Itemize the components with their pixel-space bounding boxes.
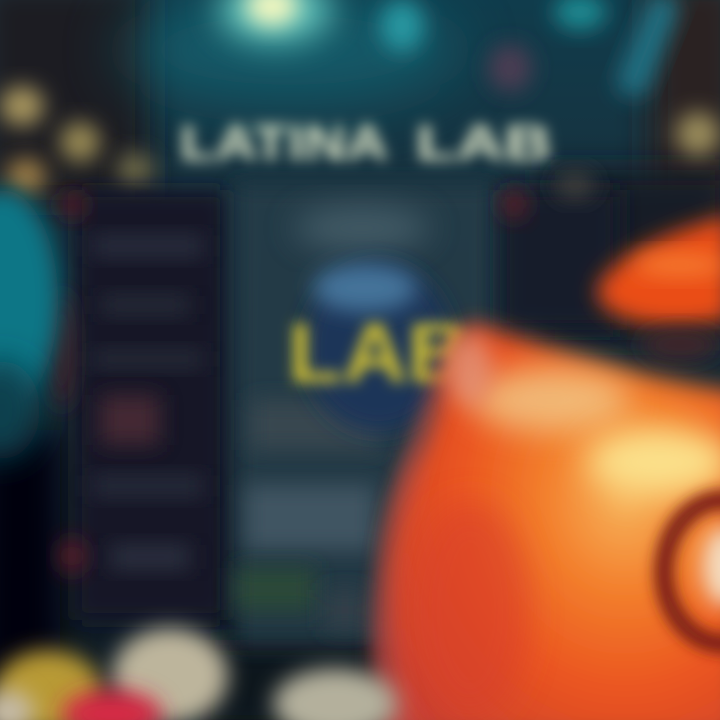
ceiling light	[217, 0, 683, 102]
bokeh light: right	[676, 112, 720, 156]
large tomato	[375, 322, 720, 720]
panel: right dark board	[500, 171, 620, 330]
foreground food: bottom centre	[273, 668, 397, 720]
foreground food: bottom left	[0, 628, 228, 720]
title: LAB	[416, 115, 552, 171]
teal shape left	[0, 190, 58, 460]
orange pepper right	[598, 215, 720, 361]
icon: globe badge: LAB	[288, 306, 472, 400]
icon: globe badge	[288, 264, 472, 432]
icon: spiral stem	[664, 500, 720, 644]
title: LATINA	[180, 115, 388, 171]
panel: left dark board	[50, 190, 227, 620]
bokeh lights: left	[0, 86, 153, 194]
title	[180, 115, 552, 171]
panel: centre board	[235, 185, 495, 645]
